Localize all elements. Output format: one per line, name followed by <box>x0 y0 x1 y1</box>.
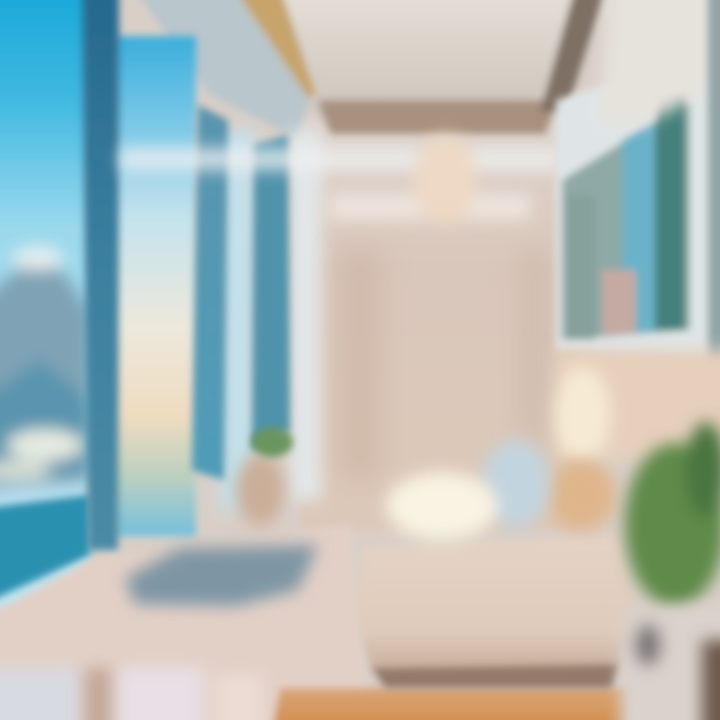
right window reflection <box>602 270 636 334</box>
large plant <box>625 422 720 607</box>
back wall <box>300 120 580 530</box>
right corner shadow <box>702 640 720 720</box>
ceiling beam left <box>120 0 310 138</box>
window pillar: right <box>252 135 290 450</box>
ceiling beam right <box>540 0 614 112</box>
ceiling shadow band <box>318 100 558 134</box>
floor reflections <box>0 668 263 720</box>
right lower wall <box>554 350 720 463</box>
plant pot <box>620 602 720 720</box>
sea <box>0 495 90 610</box>
pot <box>236 454 284 526</box>
top right curtain <box>600 0 720 125</box>
right window glass <box>562 100 690 340</box>
right window frame <box>556 50 720 360</box>
left window sky <box>0 0 90 610</box>
sofa <box>356 535 634 688</box>
right window mullion <box>655 90 685 330</box>
wall panel shading <box>340 250 550 480</box>
cushion: orange <box>548 459 616 531</box>
distant mountains <box>0 246 90 490</box>
right window sky <box>622 118 658 335</box>
wooden ceiling beam <box>220 0 316 100</box>
cushion: white <box>386 472 498 540</box>
right window mullion left <box>567 195 595 340</box>
second window sky <box>114 36 196 536</box>
light streaks across the room <box>120 134 560 226</box>
ceiling <box>120 0 625 138</box>
cushion: blue <box>482 440 550 528</box>
window pillar: left <box>82 0 119 550</box>
sea foam <box>7 429 83 461</box>
sofa cushions <box>386 440 616 540</box>
right wall edge <box>708 0 720 400</box>
floor <box>0 525 630 720</box>
leaves <box>251 427 293 457</box>
window pillar: centre <box>192 105 228 480</box>
pale light column <box>290 130 322 500</box>
potted plant: table <box>236 427 293 526</box>
third window pane <box>220 130 256 510</box>
sofa base shadow <box>372 664 620 688</box>
glass table <box>125 545 318 606</box>
wood floor <box>270 688 630 720</box>
glowing lamp light <box>554 367 610 463</box>
